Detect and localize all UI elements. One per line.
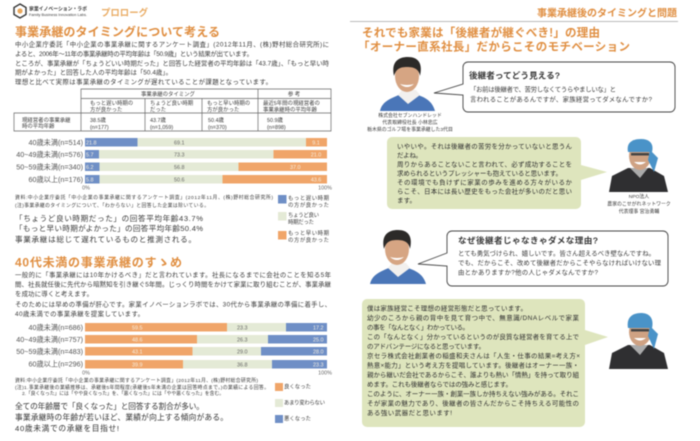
caption: Miyaji (607, 193, 671, 215)
section tag: prologue: プロローグ (101, 7, 149, 18)
source notes: performance: (注)1.事業承継後の業績推移は、承継後5年間程度(承継後5年未満の企業は回答時点まで。)の業績による回答。 (15, 384, 269, 391)
bar chart: performance by age: 29.0 (237, 350, 248, 356)
bar chart: performance by age: 25.0 (313, 338, 324, 344)
bar chart: timing by age: 40~49歳未満(n=576) (16, 150, 83, 159)
bar chart: performance by age: 60歳以上(n=296) (28, 360, 83, 368)
speech bubble: answer 1: ます。 (397, 196, 416, 204)
table: average age by timing: 方が良かった (90, 106, 122, 114)
speech bubble: answer 2: のアドバンテージになると思っています。 (367, 342, 485, 350)
table: average age by timing: もっと遅い時期の (90, 99, 133, 107)
table: average age by timing: 事業承継のタイミング (141, 90, 196, 98)
bar chart: timing by age: 37.0 (290, 165, 300, 171)
table: average age by timing: 事業承継時の平均年齢 (263, 106, 318, 114)
table: average age by timing: (n=370) (208, 125, 227, 131)
bar chart: timing by age: 69.1 (174, 140, 184, 146)
bar chart: performance by age: 50~59歳未満(n=483) (16, 347, 83, 356)
speech bubble: answer 2: 僕は家族経営こそ理想の経営形態だと思っています。 (367, 304, 527, 312)
heading: motivation (358, 26, 630, 54)
caption: Miyaji: 代表理事 宮治勇輔 (619, 208, 659, 215)
legend: performance: あまり変わらない (284, 398, 325, 406)
body text: under 40: を成功に導くと考えます。 (15, 289, 93, 298)
bar chart: performance by age: 100% (318, 370, 332, 376)
bar chart: performance by age: 48.6 (132, 338, 142, 344)
source notes (15, 194, 273, 209)
caption: Miyaji: 農家のこせがれネットワーク (607, 200, 671, 208)
bar chart: performance by age: 23.3 (313, 362, 324, 368)
bar chart: performance by age: 59.5 (132, 326, 142, 332)
caption: Kobayashi: 栃木県のゴルフ場を事業承継した3代目 (367, 126, 453, 133)
speech bubble: answer 2: 親から継いだ会社であるからこそ、誰よりも熱い「情熱」を持って取り組 (367, 370, 580, 379)
speech bubble: answer 2: 熱意×能力」という考え方を提唱しています。後継者はオーナー一族・ (367, 360, 579, 370)
speech bubble: question 2: とても勇気づけられ、嬉しいです。皆さん超えるべき壁なんですね。 (458, 248, 655, 258)
speech bubble: answer 1: だよね。 (397, 152, 422, 160)
speech bubble: answer 2: めます。これも後継者ならではの強みと感じます。 (367, 380, 512, 388)
table: average age by timing: ちょうど良い時期 (150, 99, 193, 107)
conclusion: 全ての年齢層で「良くなった」と回答する割合が多い。 (15, 401, 204, 411)
photo: Miyaji 2 (609, 313, 668, 369)
legend: performance (275, 382, 325, 423)
section tag: timing and issues: 事業承継後のタイミングと問題 (537, 6, 677, 20)
caption: Kobayashi: 代表取締役社長 小林忠広 (382, 119, 438, 126)
speech bubble: answer 1: 周りからあることないこと言われて、必ず成功することを (397, 160, 572, 168)
heading: timing: 事業承継のタイミングについて考える (15, 24, 220, 39)
table: average age by timing: 現経営者の事業承継 (22, 116, 71, 124)
speech bubble: answer 1: 求められるというプレッシャーも抱えていると思います。 (397, 168, 562, 178)
bar chart: timing by age: 50.6 (174, 178, 184, 184)
table: average age by timing: 最近5年間の現経営者の (263, 99, 320, 107)
speech bubble: answer 1: その環境でも負けずに家業の歩みを進める方々がいるか (397, 178, 572, 186)
speech bubble: question 2: なぜ後継者じゃなきゃダメな理由? (458, 234, 598, 246)
bar chart: performance by age: 26.3 (237, 338, 248, 344)
source notes: (注)事業承継のタイミングについて、「わからない」と回答した企業は除いている。 (15, 202, 209, 209)
logo (14, 4, 88, 18)
bar chart: timing by age: 21.0 (311, 152, 321, 158)
bar chart: timing by age: 5.8 (86, 178, 94, 184)
speech bubble: answer 1: いやいや。それは後継者の苦労を分かっていないと思うん (397, 142, 572, 150)
table: average age by timing: 参 考 (288, 90, 300, 98)
bar chart: timing by age: 40歳未満(n=514) (28, 138, 83, 147)
photo: Miyaji (609, 139, 668, 192)
photo: Kobayashi (380, 57, 435, 111)
table: average age by timing: もっと早い時期の (207, 100, 250, 107)
body text: under 40: 一般的に「事業承継には10年かけるべき」だと言われています。社長になるまでに会社のことを知る5年 (15, 270, 332, 279)
conclusion (15, 401, 228, 433)
intro text: 理想と比べて実際は事業承継のタイミングが遅れていることが課題となっています。 (15, 77, 272, 86)
logo: 家業イノベーション・ラボ (29, 4, 88, 12)
speech bubble: answer 1: らこそ、日本には長い歴史をもった会社が多いのだと思い (397, 186, 572, 196)
legend: performance: 悪くなった (284, 416, 311, 422)
table: average age by timing: 方が良かった (207, 106, 239, 114)
bar chart: timing by age: 43.6 (311, 178, 321, 184)
bar chart: performance by age: 39.9 (132, 362, 142, 368)
caption: Kobayashi: 株式会社セブンハンドレッド (378, 112, 442, 119)
table: average age by timing: (n=177) (90, 125, 109, 131)
source notes: 資料:中小企業庁委託「中小企業の事業承継に関するアンケート調査」(2012年11月、(株)野村総合研究所) (15, 194, 273, 201)
speech bubble: answer 2: ある強い武器だと思います! (367, 408, 452, 417)
photo: Kobayashi 2 (370, 230, 426, 284)
bar chart: performance by age: 40歳未満(n=686) (28, 323, 83, 332)
speech bubble: question 2 (418, 231, 668, 286)
speech bubble: answer 1 (387, 137, 607, 209)
intro text: 期がよかった」と回答した人の平均年齢は「50.4歳」。 (15, 68, 172, 76)
summary: timing (15, 213, 203, 244)
table: average age by timing: 50.9歳 (267, 116, 283, 124)
bar chart: timing by age: 56.8 (174, 165, 184, 171)
body text: under 40 (15, 270, 332, 318)
source notes: performance: 2.「良くなった」には「やや良くなった」を、「悪くなった」には「やや悪くなった」を含む。 (22, 390, 224, 397)
bar chart: performance by age: 43.1 (132, 350, 142, 356)
speech bubble: question 1: 言われることがあるんですが、家族経営ってダメなんですか? (470, 94, 652, 104)
bar chart: performance by age: 36.8 (237, 362, 248, 368)
conclusion: 40歳未満での承継を目指せ! (15, 423, 119, 433)
bar chart: timing by age: 0% (82, 186, 90, 192)
table: average age by timing: 43.7歳 (150, 116, 166, 124)
speech bubble: answer 2: の事を「なんとなく」わかっている。 (367, 322, 469, 332)
table: average age by timing: だった (150, 106, 166, 114)
intro text (15, 40, 330, 86)
table: average age by timing: (n=898) (267, 125, 286, 131)
bar chart: performance by age: 40~49歳未満(n=757) (16, 335, 83, 344)
speech bubble: question 1: 後継者ってどう見える? (469, 70, 560, 80)
intro text: ところが、事業承継が「ちょうどいい時期だった」と回答した経営者の平均年齢は「43.7歳」、「もっと早い時 (15, 58, 330, 68)
table: average age by timing (14, 89, 331, 131)
speech bubble: question 1 (434, 62, 675, 112)
bar chart: performance by age: 17.2 (313, 326, 324, 332)
speech bubble: answer 2: このように、オーナー一族・創業一族しか持ちえない強みがある。それこ (367, 389, 579, 398)
source notes: performance (15, 377, 269, 397)
legend: timing: の方が良かった (288, 236, 329, 244)
legend: timing: もっと早い時期 (288, 230, 329, 237)
bar chart: performance by age: 28.0 (313, 350, 324, 356)
bar chart: timing by age: 73.3 (174, 152, 184, 158)
bar chart: performance by age: 0% (82, 370, 90, 376)
summary: timing: 「もっと早い時期がよかった」の回答平均年齢50.4% (15, 223, 203, 233)
legend: timing: ちょうど良い (288, 211, 319, 219)
body text: under 40: 40歳未満での事業承継を提案しています。 (15, 309, 144, 318)
bar chart: timing by age: 21.8 (86, 140, 96, 146)
speech bubble: answer 2: この「なんとなく」分かっているというのが良質な経営者を育てる上で (367, 332, 580, 341)
bar chart: timing by age: 9.1 (312, 140, 320, 146)
logo: Family Business Innovation Labs. (29, 13, 87, 17)
summary: timing: 「ちょうど良い時期だった」の回答平均年齢43.7% (15, 213, 203, 223)
source notes: performance: 資料:中小企業庁委託「中小企業の事業承継に関するアンケート調査」(2012年11月、(株)野村総合研究所) (15, 377, 258, 384)
bar chart: performance by age: 23.3 (237, 326, 248, 332)
bar chart: performance by age (16, 323, 332, 376)
speech bubble: answer 2: そが家業の魅力であり、後継者の皆さんだからこそ持ちえる可能性の (367, 398, 579, 408)
speech bubble: question 2: でも、だからこそ、改めて後継者だからこそやらなければいけない理 (458, 258, 662, 267)
legend: timing: の方が良かった (288, 201, 329, 209)
bar chart: timing by age: 60歳以上(n=176) (28, 175, 83, 184)
heading: motivation: 「オーナー直系社長」だからこそのモチベーション (358, 40, 630, 54)
bar chart: timing by age: 6.2 (86, 165, 94, 171)
conclusion: 事業承継時の年齢が若いほど、業績が向上する傾向がある。 (15, 412, 228, 422)
body text: under 40: そのためには早めの準備が肝心です。家業イノベーションラボでは、30代から事業承継の準備に着手し、 (15, 300, 331, 308)
intro text: 中小企業庁委託「中小企業の事業承継に関するアンケート調査」(2012年11月、(株)野村総合研究所)に (15, 40, 329, 48)
bar chart: timing by age: 5.7 (86, 152, 94, 158)
body text: under 40: 間、社長就任後に先代から暗黙知を引き継ぐ5年間。じっくり時間をかけて家業に取り組むことが、事業承継 (15, 280, 332, 288)
header rule (350, 21, 678, 22)
speech bubble: answer 2: 京セラ株式会社創業者の稲盛和夫さんは「人生・仕事の結果=考え方× (367, 351, 580, 360)
table: average age by timing: 時の平均年齢 (22, 122, 55, 130)
bar chart: timing by age (16, 138, 332, 192)
table: average age by timing: (n=1,059) (150, 125, 173, 131)
speech bubble: answer 2 (362, 299, 608, 427)
legend: timing: 時期だった (288, 219, 314, 226)
legend: performance: 良くなった (284, 382, 311, 390)
speech bubble: question 2: 由とかありますか?他の人じゃダメなんですか? (458, 268, 598, 276)
heading: under 40: 40代未満の事業承継のすゝめ (15, 254, 182, 270)
legend: timing (278, 194, 329, 244)
bar chart: timing by age: 100% (318, 186, 332, 192)
table: average age by timing: 38.5歳 (90, 116, 106, 124)
intro text: よると、2006年～11年の事業承継時の平均年齢は「50.9歳」という結果が出ています。 (15, 49, 253, 58)
speech bubble: question 1: 「お前は後継者で、苦労しなくてうらやましいな」と (470, 84, 616, 94)
bar chart: timing by age: 50~59歳未満(n=340) (16, 162, 83, 172)
heading: motivation: それでも家業は「後継者が継ぐべき!」の理由 (362, 26, 600, 40)
summary: timing: 事業承継は総じて遅れているものと推測される。 (15, 234, 196, 244)
table: average age by timing: 50.4歳 (208, 116, 224, 124)
legend: timing: もっと遅い時期 (288, 194, 329, 202)
caption: Kobayashi (367, 112, 453, 133)
speech bubble: answer 2: 幼少のころから親の背中を見て育つ中で、無意識/DNAレベルで家業 (367, 313, 580, 322)
caption: Miyaji: NPO法人 (629, 193, 649, 200)
